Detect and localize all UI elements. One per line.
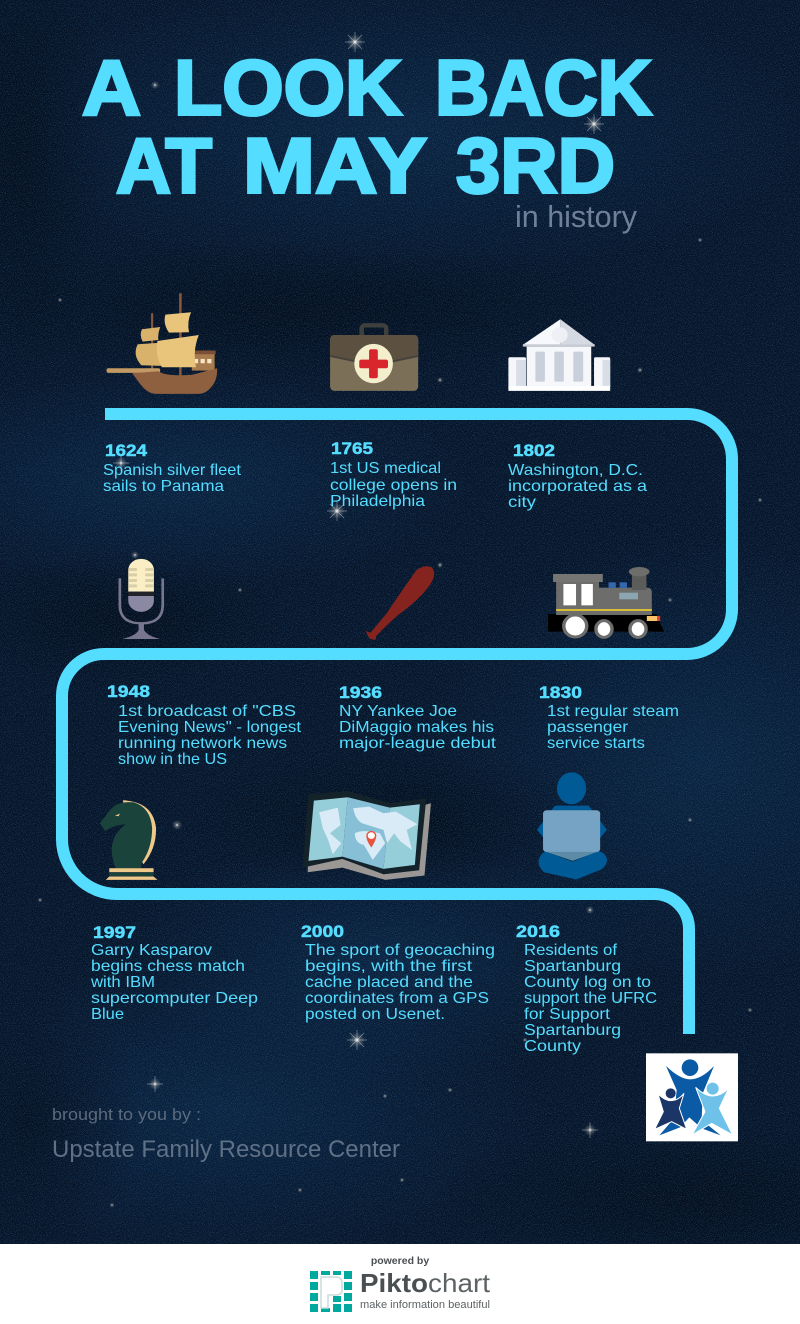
title: 3RD [456,122,615,210]
icon: medical kit [330,325,418,391]
event: 1830: 1st regular steam [547,703,679,720]
event: 1948: Evening News" - longest [118,719,302,736]
event: 1936 [339,683,497,752]
event: 1765 [330,439,457,510]
event: 1624: sails to Panama [103,478,224,495]
event: 2016: 2016 [516,922,560,941]
event: 2000 [301,922,495,1023]
footer: powered by Piktochart: make information beautiful [360,1299,490,1311]
event: 1936: major-league debut [339,735,497,752]
event: 1802: incorporated as a [508,478,647,495]
event: 1624 [103,441,242,495]
event: 1948: 1st broadcast of "CBS [118,703,296,720]
event: 1765: 1765 [331,439,373,458]
event: 1802 [508,441,647,511]
event: 1948: show in the US [118,751,227,768]
icon: world map [303,791,431,880]
icon: ship [106,293,217,394]
event: 2016: support the UFRC [524,990,657,1007]
event: 1765: Philadelphia [330,493,425,510]
icon: steam locomotive [548,567,664,637]
icon: baseball bat [366,566,434,640]
event: 1997: Garry Kasparov [91,942,212,959]
title [82,44,652,210]
credit label: brought to you by : [52,1106,201,1124]
subtitle: in history [515,199,637,234]
event: 2016: Residents of [524,942,618,959]
icon: person with laptop [537,772,607,880]
event: 1936: DiMaggio makes his [339,719,494,736]
event: 1997: begins chess match [91,958,245,975]
event: 1948: running network news [118,735,287,752]
footer: powered by Piktochart [0,1244,800,1324]
event: 1936: 1936 [339,683,382,702]
title: AT [116,122,212,210]
event: 1936: NY Yankee Joe [339,703,457,720]
title: A [82,44,141,132]
event: 2016: Spartanburg [524,958,621,975]
event: 1830: service starts [547,735,645,752]
event: 1830: 1830 [539,683,582,702]
event: 2000: The sport of geocaching [305,942,495,959]
title: BACK [435,44,652,132]
event: 1765: 1st US medical [330,460,441,477]
event: 2016: County [524,1038,581,1055]
event: 2016: for Support [524,1006,611,1023]
event: 2016: County log on to [524,974,651,991]
event: 1624: 1624 [105,441,148,460]
event: 1948: 1948 [107,682,150,701]
event: 1802: Washington, D.C. [508,462,643,479]
event: 2000: coordinates from a GPS [305,990,489,1007]
event: 2000: posted on Usenet. [305,1006,445,1023]
event: 1624: Spanish silver fleet [103,462,242,479]
event: 1997: supercomputer Deep [91,990,258,1007]
event: 1997: with IBM [90,974,155,991]
event: 1948 [107,682,302,768]
event: 1997: Blue [91,1006,124,1023]
icon: chess knight [100,800,157,880]
credit organisation: Upstate Family Resource Center [52,1136,400,1163]
event: 2000: cache placed and the [305,974,473,991]
event: 2000: begins, with the first [305,958,473,975]
logo: Upstate Family Resource Center [646,1053,738,1141]
footer: powered by Piktochart: chart [428,1268,491,1298]
event: 2000: 2000 [301,922,344,941]
event: 1997: 1997 [93,923,136,942]
title: LOOK [174,44,402,132]
footer: powered by Piktochart: powered by [371,1255,429,1267]
event: 1830 [539,683,679,752]
event: 1765: college opens in [330,477,457,494]
event: 2016 [516,922,657,1055]
footer: powered by Piktochart: Pikto [360,1268,428,1298]
event: 1802: 1802 [513,441,555,460]
icon: microphone [120,559,163,639]
timeline path [62,414,732,1034]
event: 1997 [90,923,258,1023]
event: 1802: city [508,494,536,511]
event: 2016: Spartanburg [524,1022,621,1039]
icon: government building [508,319,610,391]
event: 1830: passenger [547,719,629,736]
title: MAY [243,122,427,210]
